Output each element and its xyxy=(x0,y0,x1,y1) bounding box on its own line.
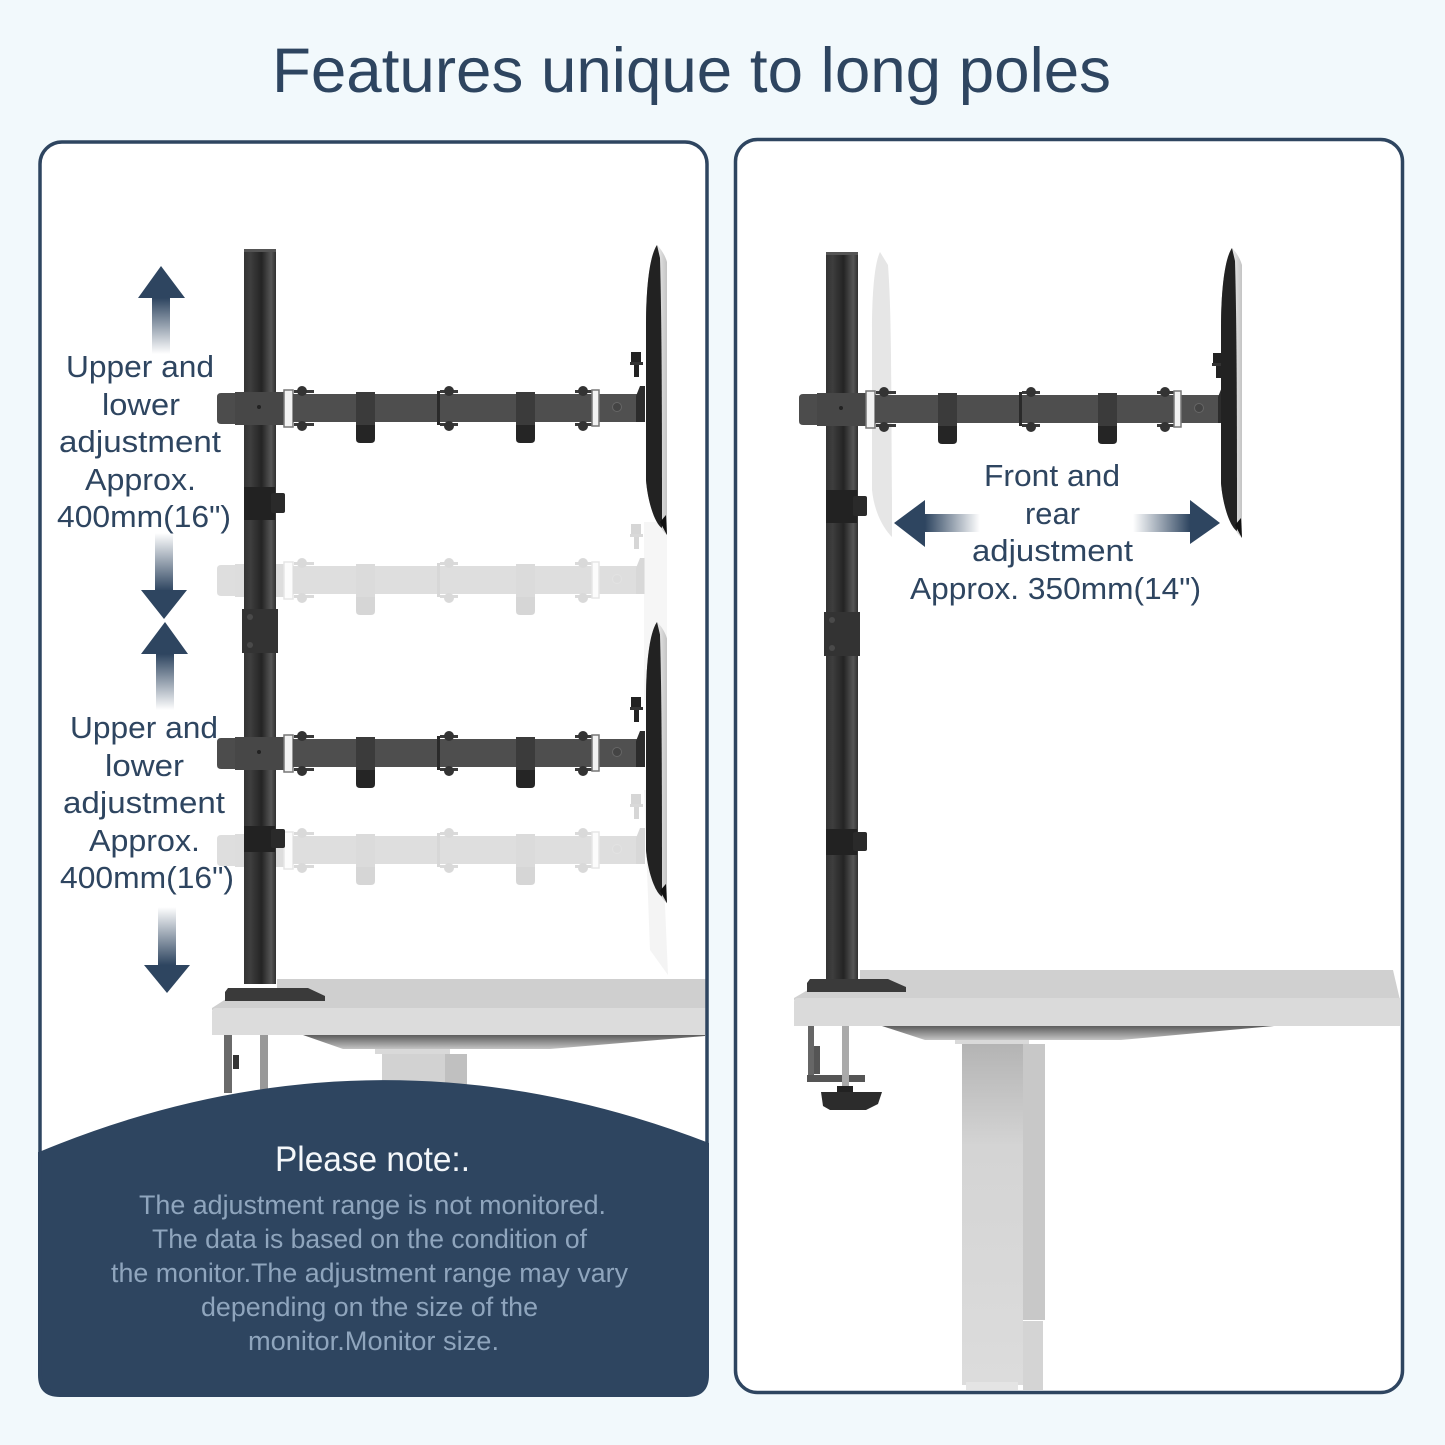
panel: front and rear adjustment xyxy=(736,140,1402,1392)
note background xyxy=(38,1080,709,1397)
label: upper and lower adjustment 1: adjustment xyxy=(59,424,221,459)
label: upper and lower adjustment 2: adjustment xyxy=(63,785,225,820)
note body: depending on the size of the xyxy=(201,1292,538,1322)
label: front and rear adjustment: Front and xyxy=(984,458,1120,493)
ghost monitor lower position 1 xyxy=(644,522,667,700)
note body xyxy=(111,1190,628,1356)
label: front and rear adjustment: rear xyxy=(1025,496,1080,531)
ghost arm lower position 2 xyxy=(217,794,645,885)
pole base right xyxy=(807,979,906,992)
note body: monitor.Monitor size. xyxy=(248,1326,499,1356)
label: front and rear adjustment: adjustment xyxy=(972,533,1133,568)
label: upper and lower adjustment 2: Upper and xyxy=(70,710,218,745)
panel: vertical adjustment xyxy=(38,142,709,1397)
label: upper and lower adjustment 1: Approx. xyxy=(85,462,196,497)
label: upper and lower adjustment 1: Upper and xyxy=(66,349,214,384)
note body: The adjustment range is not monitored. xyxy=(139,1190,606,1220)
label: front and rear adjustment: Approx. 350mm(14") xyxy=(910,571,1201,606)
desk right xyxy=(794,970,1400,1390)
note body: the monitor.The adjustment range may vary xyxy=(111,1258,628,1288)
arrow: right xyxy=(1133,500,1220,544)
label: upper and lower adjustment 2: 400mm(16") xyxy=(60,860,234,895)
label: upper and lower adjustment 1: 400mm(16") xyxy=(57,499,231,534)
pole with collars xyxy=(242,249,285,984)
lower arm xyxy=(217,697,645,788)
label: upper and lower adjustment 2: lower xyxy=(105,748,184,783)
panel background right xyxy=(736,140,1402,1392)
ghost monitor lower position 2 xyxy=(644,790,668,975)
label: upper and lower adjustment 2: Approx. xyxy=(89,823,200,858)
pole right xyxy=(824,252,867,987)
note body: The data is based on the condition of xyxy=(152,1224,587,1254)
label: upper and lower adjustment 1: lower xyxy=(102,387,180,422)
upper arm xyxy=(217,352,645,443)
clamp right xyxy=(807,1026,882,1110)
monitor right xyxy=(1221,248,1242,538)
title: Features unique to long poles xyxy=(272,36,1111,106)
arrow: down 1 xyxy=(141,533,187,619)
label: front and rear adjustment xyxy=(910,458,1201,606)
ghost arm lower position 1 xyxy=(217,524,645,615)
upper monitor xyxy=(646,245,667,535)
pole base clamp xyxy=(225,988,325,1001)
panel border right xyxy=(736,140,1402,1392)
arrow: left xyxy=(894,500,980,547)
panel background left xyxy=(40,142,707,1395)
ghost monitor xyxy=(872,252,892,537)
arrow: up 2 xyxy=(141,622,188,710)
lower monitor xyxy=(646,622,667,903)
arm right xyxy=(799,353,1227,444)
note heading: Please note:. xyxy=(275,1140,470,1179)
desk left xyxy=(212,979,707,1093)
arrow: up 1 xyxy=(138,266,185,354)
label: upper and lower adjustment 1 xyxy=(57,349,231,534)
panel border left xyxy=(40,142,707,1395)
arrow: down 2 xyxy=(144,907,190,993)
label: upper and lower adjustment 2 xyxy=(60,710,234,895)
